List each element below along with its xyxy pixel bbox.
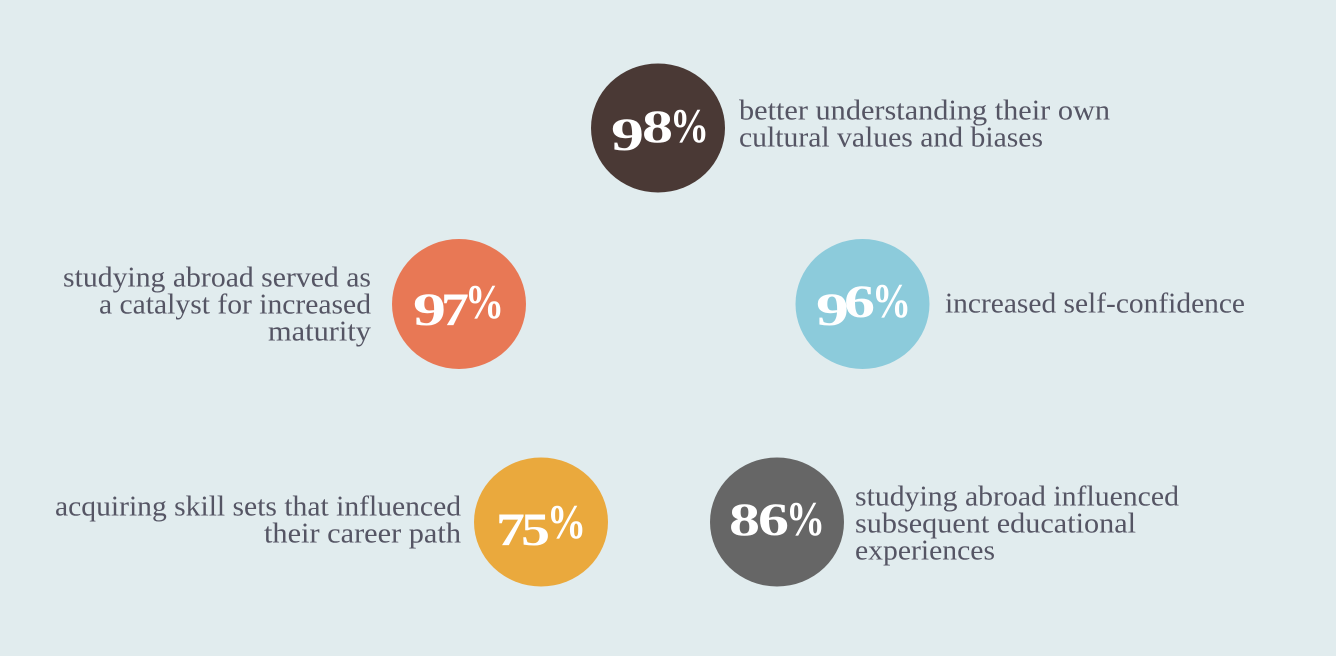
value: 98%: % <box>670 98 709 153</box>
stat: 97% <box>63 239 526 369</box>
text: educational experiences: experiences <box>855 536 995 566</box>
value: 86%: % <box>786 491 825 546</box>
circle: 98% <box>591 64 725 192</box>
text: maturity: studying abroad served as <box>63 262 371 294</box>
circle: 97% <box>392 239 526 369</box>
text: career path <box>55 492 461 550</box>
text: self-confidence: increased self-confidence <box>945 288 1245 320</box>
text: maturity <box>63 262 371 348</box>
text: career path: acquiring skill sets that influenced <box>55 492 461 522</box>
circle: 86% <box>710 458 844 586</box>
text: maturity: a catalyst for increased <box>99 290 371 320</box>
stat: 98% <box>591 64 1110 192</box>
stat: 96% <box>796 239 1245 369</box>
circle: 96% <box>796 239 930 369</box>
value: 96%: % <box>872 273 911 328</box>
text: maturity: maturity <box>268 316 371 348</box>
value: 98%: 9 <box>611 109 644 161</box>
value: 96%: 9 <box>816 284 849 336</box>
value: 75%: % <box>547 494 586 549</box>
text: educational experiences: subsequent educational <box>855 508 1136 540</box>
value: 75%: 5 <box>521 504 550 556</box>
value: 96%: 6 <box>844 276 875 328</box>
value: 97%: 7 <box>441 284 469 336</box>
value: 86%: 8 <box>729 494 760 546</box>
circle: 75% <box>474 458 608 586</box>
text: cultural values <box>739 96 1110 154</box>
text: educational experiences <box>855 482 1179 566</box>
value: 98%: 8 <box>642 101 673 153</box>
value: 97%: % <box>465 274 504 329</box>
value: 86%: 6 <box>758 494 789 546</box>
stat: 86% <box>710 458 1179 586</box>
value: 97%: 9 <box>413 284 446 336</box>
text: educational experiences: studying abroad influenced <box>855 482 1179 512</box>
text: cultural values: better understanding their own <box>739 96 1110 126</box>
stat: 75% <box>55 458 608 586</box>
text: cultural values: cultural values and biases <box>739 122 1043 154</box>
text: career path: their career path <box>264 518 461 550</box>
value: 75%: 7 <box>496 504 525 556</box>
